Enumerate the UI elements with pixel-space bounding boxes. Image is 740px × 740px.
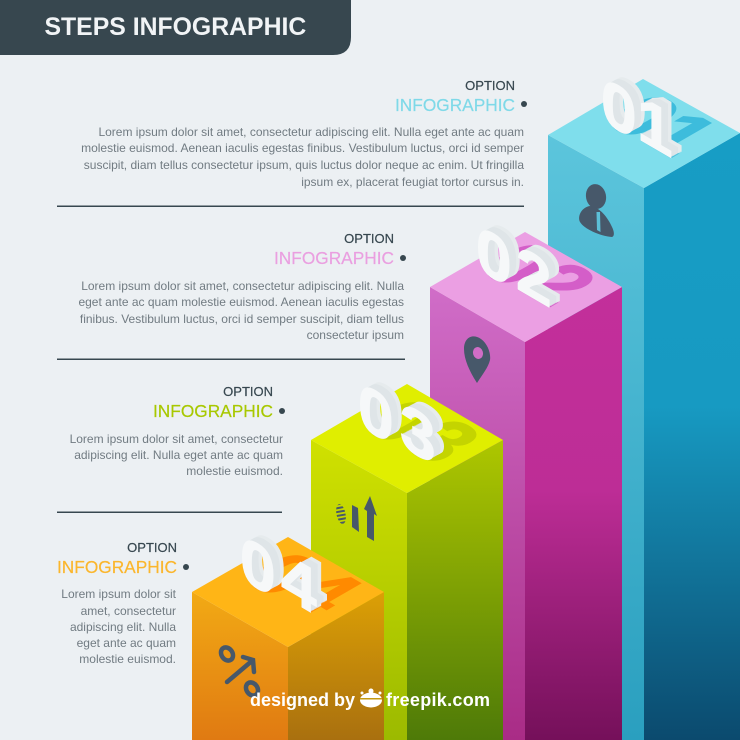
freepik watermark: designed by xyxy=(250,690,355,710)
text block: option 3: adipiscing elit. Nulla eget ante ac quam xyxy=(74,448,283,462)
text block: option 1: suscipit, diam tellus consectetur ipsum, quis luctus dolor neque ac enim. Ut fringilla xyxy=(84,158,524,172)
text block: option 3 xyxy=(70,384,285,478)
bar 1: blue xyxy=(548,79,740,740)
text block: option 2: finibus. Vestibulum luctus, orci id semper suscipit, diam tellus xyxy=(80,312,404,326)
title: STEPS INFOGRAPHIC xyxy=(44,14,306,41)
freepik watermark: freepik.com xyxy=(386,690,490,710)
bar 4: orange xyxy=(192,537,384,740)
text block: option 2: INFOGRAPHIC xyxy=(274,248,394,268)
text block: option 4: INFOGRAPHIC xyxy=(57,557,177,577)
text block: option 4: Lorem ipsum dolor sit xyxy=(61,587,177,601)
number 03 with shadow: 0 xyxy=(342,387,460,455)
number 04 with shadow: 4 xyxy=(281,537,317,630)
number 01 with shadow: 0 xyxy=(601,62,637,155)
bar 3: lime xyxy=(311,384,503,740)
number 03 with shadow: 3 xyxy=(384,407,502,475)
icon: person xyxy=(579,182,614,237)
text block: option 3: OPTION xyxy=(223,384,273,399)
icon: rising bars and arrow xyxy=(339,496,377,541)
number 02 with shadow: 2 xyxy=(500,250,618,318)
text block: option 3: Lorem ipsum dolor sit amet, consectetur xyxy=(70,432,283,446)
text block: option 2 xyxy=(78,231,406,342)
header banner xyxy=(0,0,351,55)
text block: option 2: consectetur ipsum xyxy=(307,328,404,342)
number 01 with shadow: 1 xyxy=(621,100,739,168)
number 02 with shadow: 2 xyxy=(516,230,552,323)
text block: option 1: OPTION xyxy=(465,78,515,93)
number 03 with shadow: 3 xyxy=(400,387,436,480)
text block: option 1: molestie euismod. Aenean iaculis egestas finibus. Vestibulum luctus, orci id semper xyxy=(81,141,524,155)
text block: option 4: OPTION xyxy=(127,540,177,555)
number 04 with shadow xyxy=(242,537,362,613)
number 04 with shadow: 4 xyxy=(265,557,383,625)
text block: option 2: eget ante ac quam molestie euismod. Aenean iaculis egestas xyxy=(78,295,404,309)
icon: growth arrow with rings xyxy=(218,645,261,698)
text block: option 3: INFOGRAPHIC xyxy=(153,401,273,421)
number 01 with shadow: 0 xyxy=(585,82,703,150)
text block: option 4 xyxy=(57,540,189,666)
text block: option 2: OPTION xyxy=(344,231,394,246)
text block: option 4: molestie euismod. xyxy=(79,652,176,666)
text block: option 3: molestie euismod. xyxy=(186,464,283,478)
text block: option 1: INFOGRAPHIC xyxy=(395,95,515,115)
number 02 with shadow xyxy=(478,227,592,308)
number 02 with shadow: 0 xyxy=(476,210,512,303)
number 02 with shadow: 0 xyxy=(460,230,578,298)
text block: option 4: amet, consectetur xyxy=(81,604,176,618)
number 04 with shadow: 0 xyxy=(240,520,276,613)
number 01 with shadow xyxy=(603,79,712,158)
number 01 with shadow: 1 xyxy=(637,80,673,173)
text block: option 1: ipsum ex, placerat feugiat tortor cursus in. xyxy=(301,175,524,189)
text block: option 2: Lorem ipsum dolor sit amet, consectetur adipiscing elit. Nulla xyxy=(81,279,404,293)
icon: freepik logo xyxy=(360,688,382,708)
icon: location pin xyxy=(464,336,490,383)
text block: option 4: adipiscing elit. Nulla xyxy=(70,620,176,634)
bar 2: magenta xyxy=(430,232,622,740)
number 03 with shadow: 0 xyxy=(358,367,394,460)
text block: option 4: eget ante ac quam xyxy=(77,636,176,650)
text block: option 1: Lorem ipsum dolor sit amet, consectetur adipiscing elit. Nulla eget ante ac quam xyxy=(98,125,524,139)
text block: option 1 xyxy=(81,78,527,189)
number 04 with shadow: 0 xyxy=(224,540,342,608)
number 03 with shadow xyxy=(360,384,476,461)
